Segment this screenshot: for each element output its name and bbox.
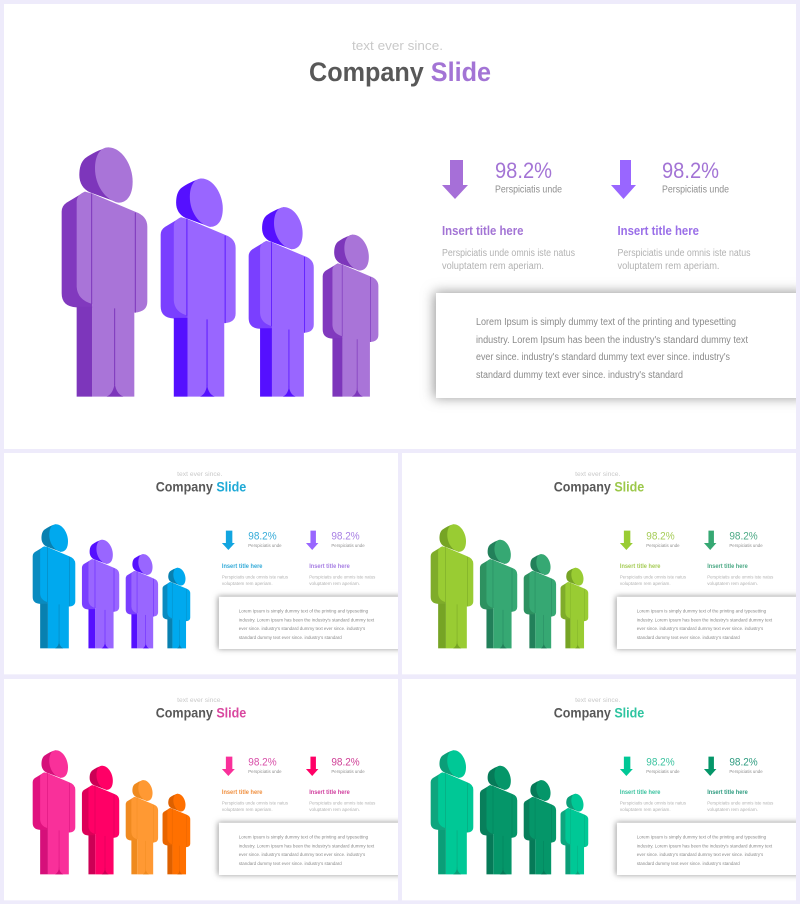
title: Company Slide <box>309 57 491 87</box>
text block 1: Insert title here <box>442 223 524 238</box>
callout box <box>218 822 403 875</box>
callout box: Lorem Ipsum is simply dummy text of the printing and typesetting <box>637 609 766 615</box>
text block 2: Perspiciatis unde omnis iste natus <box>309 800 376 806</box>
icon: down arrow 1 <box>442 160 468 199</box>
text block 2: Perspiciatis unde omnis iste natus <box>707 574 774 580</box>
text block 1: Insert title here <box>222 563 263 570</box>
callout box <box>218 596 403 649</box>
panel: main purple slide <box>4 4 800 449</box>
text block 1: voluptatem rem aperiam. <box>222 581 273 587</box>
text block 2: voluptatem rem aperiam. <box>707 581 758 587</box>
people chart <box>33 750 190 874</box>
stat 1: 98.2% <box>248 531 277 543</box>
stat 2: Perspiciatis unde <box>729 769 763 775</box>
callout box: ever since. industry's standard dummy text ever since. industry's <box>637 626 764 632</box>
text block 2: Perspiciatis unde omnis iste natus <box>309 574 376 580</box>
callout box: industry. Lorem Ipsum has been the industry's standard dummy text <box>239 618 375 624</box>
text block 2: Insert title here <box>309 563 350 570</box>
stat 1 <box>248 757 282 775</box>
title: Company Slide <box>554 705 644 720</box>
panel: pink slide <box>4 679 403 900</box>
callout box: standard dummy text ever since. industry's standard <box>239 635 342 641</box>
text block 1: Perspiciatis unde omnis iste natus <box>222 574 289 580</box>
stat 2: 98.2% <box>331 531 360 543</box>
stat 2 <box>662 158 729 196</box>
people chart <box>431 524 588 648</box>
text block 1: Perspiciatis unde omnis iste natus <box>442 248 575 259</box>
stat 2 <box>331 757 365 775</box>
stat 2: Perspiciatis unde <box>662 184 729 196</box>
text block 2 <box>707 563 774 587</box>
stat 2 <box>729 757 763 775</box>
stat 2: Perspiciatis unde <box>331 543 365 549</box>
stat 1: 98.2% <box>495 158 552 183</box>
text block 1: voluptatem rem aperiam. <box>222 807 273 813</box>
stat 2: Perspiciatis unde <box>729 543 763 549</box>
text block 1: Perspiciatis unde omnis iste natus <box>620 800 687 806</box>
supertitle: text ever since. <box>177 471 223 478</box>
callout box: Lorem Ipsum is simply dummy text of the printing and typesetting <box>239 609 368 615</box>
callout box: Lorem Ipsum is simply dummy text of the printing and typesetting <box>476 317 736 328</box>
icon: down arrow 2 <box>704 757 716 776</box>
text block 1 <box>442 223 575 272</box>
text block 1: voluptatem rem aperiam. <box>620 807 671 813</box>
stat 1: Perspiciatis unde <box>248 769 282 775</box>
text block 1 <box>222 563 289 587</box>
supertitle: text ever since. <box>575 697 621 704</box>
icon: down arrow 2 <box>704 531 716 550</box>
stat 1: Perspiciatis unde <box>646 543 680 549</box>
callout box: Lorem Ipsum is simply dummy text of the printing and typesetting <box>239 835 368 841</box>
stat 1: 98.2% <box>646 531 675 543</box>
stat 1 <box>495 158 562 196</box>
text block 1: Perspiciatis unde omnis iste natus <box>222 800 289 806</box>
text block 2 <box>309 563 376 587</box>
text block 2: Perspiciatis unde omnis iste natus <box>707 800 774 806</box>
icon: down arrow 2 <box>611 160 636 199</box>
callout box: ever since. industry's standard dummy text ever since. industry's <box>239 852 366 858</box>
supertitle: text ever since. <box>177 697 223 704</box>
text block 1 <box>620 563 687 587</box>
text block 2: Insert title here <box>707 789 748 796</box>
text block 1: Insert title here <box>620 563 661 570</box>
text block 1: Insert title here <box>620 789 661 796</box>
text block 1: voluptatem rem aperiam. <box>442 261 544 272</box>
supertitle: text ever since. <box>352 39 443 53</box>
text block 1: voluptatem rem aperiam. <box>620 581 671 587</box>
stat 1: 98.2% <box>248 757 277 769</box>
people chart <box>62 147 378 397</box>
icon: down arrow 1 <box>620 757 633 776</box>
stat 2: 98.2% <box>662 158 719 183</box>
text block 2 <box>309 789 376 813</box>
stat 1: Perspiciatis unde <box>495 184 562 196</box>
text block 2 <box>707 789 774 813</box>
callout box <box>616 822 800 875</box>
stat 2: 98.2% <box>729 757 758 769</box>
title: Company Slide <box>554 479 644 494</box>
stat 1: Perspiciatis unde <box>646 769 680 775</box>
callout box: standard dummy text ever since. industry's standard <box>476 370 683 381</box>
text block 2 <box>618 223 750 272</box>
supertitle: text ever since. <box>575 471 621 478</box>
callout box <box>616 596 800 649</box>
stat 2: 98.2% <box>331 757 360 769</box>
icon: down arrow 1 <box>222 757 235 776</box>
panel: blue slide <box>4 453 403 674</box>
title: Company Slide <box>156 705 246 720</box>
stat 1 <box>646 757 680 775</box>
text block 2: Insert title here <box>309 789 350 796</box>
stat 1 <box>646 531 680 549</box>
callout box: standard dummy text ever since. industry's standard <box>637 861 740 867</box>
title: Company Slide <box>156 479 246 494</box>
callout box: ever since. industry's standard dummy text ever since. industry's <box>476 352 730 363</box>
text block 2: voluptatem rem aperiam. <box>309 807 360 813</box>
callout box: industry. Lorem Ipsum has been the industry's standard dummy text <box>239 844 375 850</box>
text block 1: Perspiciatis unde omnis iste natus <box>620 574 687 580</box>
icon: down arrow 1 <box>222 531 235 550</box>
people chart <box>431 750 588 874</box>
people chart <box>33 524 190 648</box>
callout box: industry. Lorem Ipsum has been the industry's standard dummy text <box>476 335 748 346</box>
text block 2: voluptatem rem aperiam. <box>618 261 720 272</box>
stat 2: 98.2% <box>729 531 758 543</box>
callout box: ever since. industry's standard dummy text ever since. industry's <box>637 852 764 858</box>
text block 2: Insert title here <box>707 563 748 570</box>
stat 2 <box>729 531 763 549</box>
stat 2: Perspiciatis unde <box>331 769 365 775</box>
text block 1: Insert title here <box>222 789 263 796</box>
callout box: industry. Lorem Ipsum has been the industry's standard dummy text <box>637 618 773 624</box>
icon: down arrow 2 <box>306 757 318 776</box>
text block 2: voluptatem rem aperiam. <box>707 807 758 813</box>
callout box: Lorem Ipsum is simply dummy text of the printing and typesetting <box>637 835 766 841</box>
text block 1 <box>222 789 289 813</box>
callout box: standard dummy text ever since. industry's standard <box>239 861 342 867</box>
text block 2: Perspiciatis unde omnis iste natus <box>618 248 750 259</box>
text block 2: voluptatem rem aperiam. <box>309 581 360 587</box>
panel: teal slide <box>402 679 800 900</box>
icon: down arrow 1 <box>620 531 633 550</box>
callout box <box>434 292 800 398</box>
callout box: standard dummy text ever since. industry's standard <box>637 635 740 641</box>
callout box: ever since. industry's standard dummy text ever since. industry's <box>239 626 366 632</box>
icon: down arrow 2 <box>306 531 318 550</box>
callout box: industry. Lorem Ipsum has been the industry's standard dummy text <box>637 844 773 850</box>
stat 1: 98.2% <box>646 757 675 769</box>
stat 2 <box>331 531 365 549</box>
stat 1 <box>248 531 282 549</box>
text block 2: Insert title here <box>618 223 699 238</box>
stat 1: Perspiciatis unde <box>248 543 282 549</box>
text block 1 <box>620 789 687 813</box>
panel: green slide <box>402 453 800 674</box>
